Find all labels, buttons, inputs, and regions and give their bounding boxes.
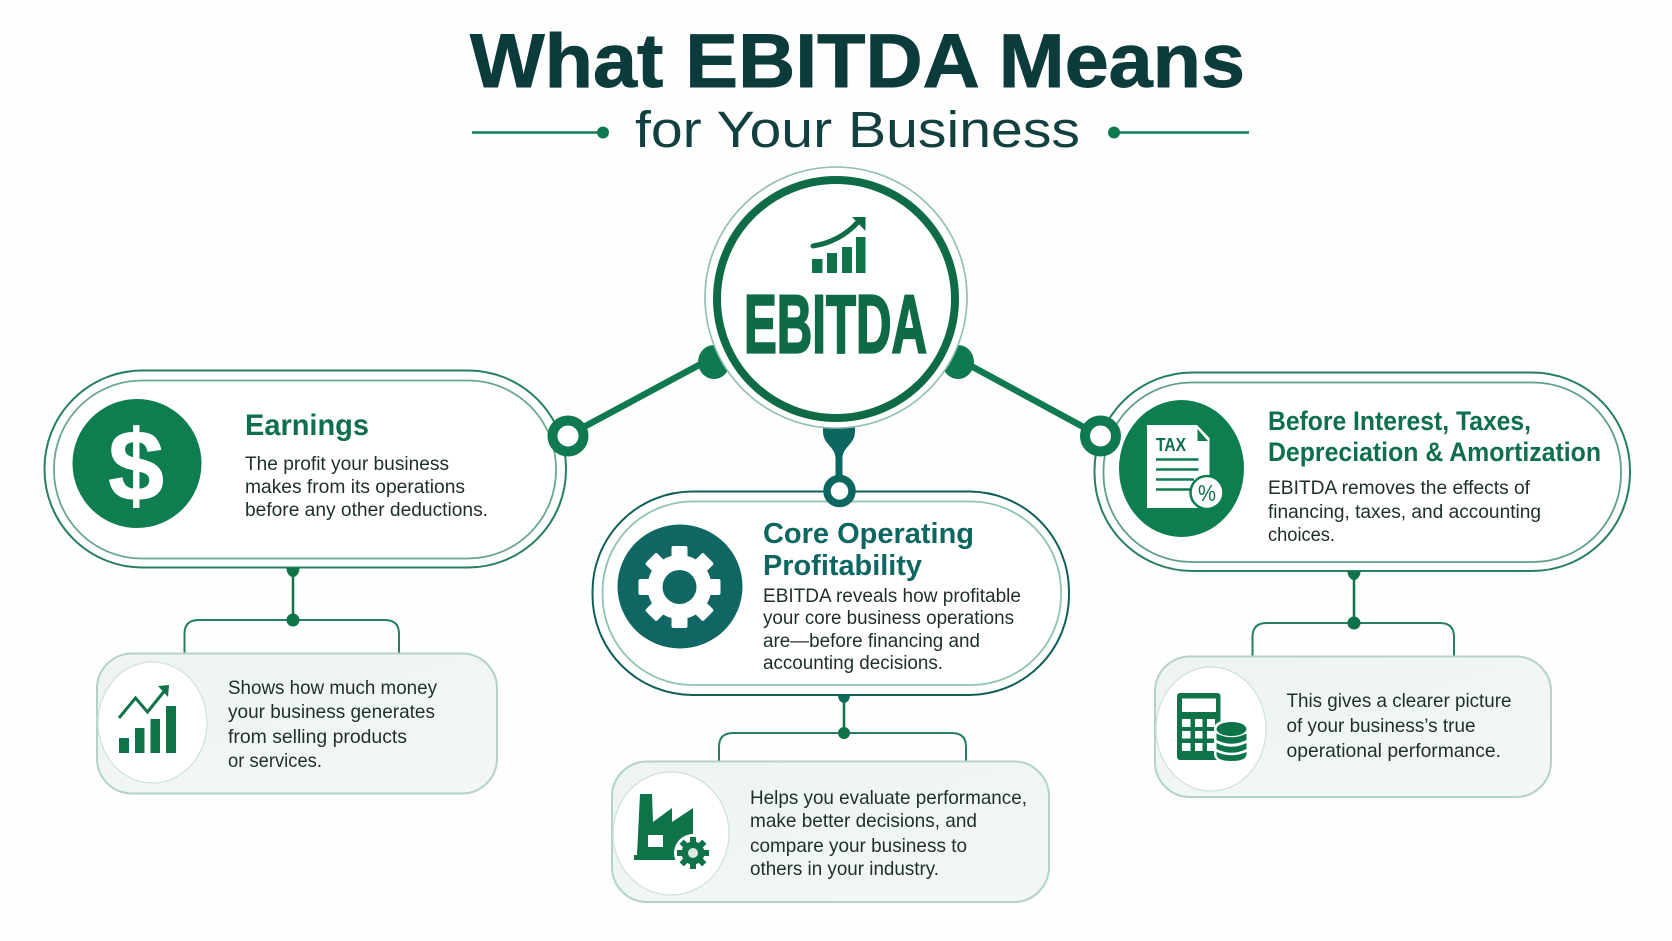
panel: Core Operating Profitability — [592, 492, 1069, 695]
connector node: Before Interest ring — [1085, 420, 1116, 452]
heading: EBITDA: EBITDA — [744, 278, 927, 370]
heading: Before Interest, Taxes, Depreciation and Amortization: Before Interest, Taxes, — [1268, 406, 1531, 436]
text: Earnings description: The profit your business — [245, 454, 449, 475]
icon: factory — [634, 794, 712, 872]
text: Earnings detail: from selling products — [228, 726, 407, 748]
heading: Core Operating Profitability: Core Operating — [763, 518, 974, 550]
heading: Before Interest, Taxes, Depreciation and Amortization: Depreciation & Amortization — [1268, 437, 1601, 467]
icon: calculator and coins — [1177, 693, 1249, 763]
text: Core detail: others in your industry. — [750, 858, 939, 880]
panel: Before Interest detail — [1155, 656, 1551, 797]
text: Core detail: compare your business to — [750, 835, 967, 857]
heading: Earnings: Earnings — [245, 409, 369, 442]
text: Core detail — [750, 787, 1027, 880]
icon: growth chart — [812, 217, 866, 273]
text: Earnings description — [245, 454, 488, 521]
text: Before Interest detail: operational performance. — [1286, 740, 1501, 762]
panel: Earnings — [44, 370, 566, 568]
subtitle with side rules: for Your Business — [635, 101, 1080, 158]
text: Before Interest description: financing, taxes, and accounting — [1268, 502, 1541, 523]
connector: Before Interest to detail — [1252, 571, 1454, 656]
title: What EBITDA Means — [470, 19, 1245, 104]
connector node: Core ring — [827, 478, 852, 504]
connector: Core to detail — [719, 695, 966, 761]
icon: tax document: % — [1198, 480, 1216, 506]
connector: Earnings to detail — [184, 568, 399, 653]
text: Earnings detail — [228, 677, 437, 772]
panel: EBITDA centre circle — [705, 167, 967, 428]
text: Earnings description: before any other deductions. — [245, 500, 488, 521]
text: Earnings detail: Shows how much money — [228, 677, 437, 699]
text: Earnings description: makes from its operations — [245, 477, 465, 498]
text: Before Interest description: EBITDA removes the effects of — [1268, 478, 1531, 499]
panel: Before Interest, Taxes, Depreciation and Amortization — [1094, 372, 1630, 571]
text: Core detail: make better decisions, and — [750, 810, 977, 832]
icon: chart with arrow — [119, 685, 176, 753]
text: Core description: accounting decisions. — [763, 653, 943, 674]
panel: Earnings detail — [97, 654, 497, 794]
connector: centre to Earnings — [567, 345, 730, 436]
text: Earnings detail: or services. — [228, 750, 322, 772]
text: Before Interest detail: This gives a clearer picture — [1286, 690, 1512, 712]
text: Core description: EBITDA reveals how profitable — [763, 586, 1021, 607]
icon: dollar — [72, 399, 202, 528]
heading: Core Operating Profitability — [763, 518, 974, 582]
text: Before Interest detail: of your business’s true — [1286, 715, 1476, 737]
icon: tax document — [1119, 400, 1244, 537]
icon: gear — [618, 524, 742, 648]
heading: Before Interest, Taxes, Depreciation and Amortization — [1268, 406, 1601, 467]
text: Before Interest description — [1268, 478, 1541, 546]
text: Before Interest description: choices. — [1268, 525, 1335, 546]
connector: centre to Core Operating Profitability — [823, 426, 855, 480]
panel: Core detail — [612, 762, 1049, 902]
connector: centre to Before Interest — [942, 345, 1100, 436]
text: Core description: your core business operations — [763, 608, 1014, 629]
icon: tax document: TAX — [1156, 434, 1187, 455]
connector node: Earnings ring — [552, 420, 584, 452]
text: Core detail: Helps you evaluate performance, — [750, 787, 1027, 809]
text: Before Interest detail — [1286, 690, 1512, 762]
text: Core description: are—before financing and — [763, 631, 980, 652]
text: Earnings detail: your business generates — [228, 701, 435, 723]
icon: dollar: $ — [108, 410, 164, 522]
subtitle with side rules — [472, 101, 1249, 158]
text: Core description — [763, 586, 1021, 674]
heading: Core Operating Profitability: Profitability — [763, 550, 922, 582]
